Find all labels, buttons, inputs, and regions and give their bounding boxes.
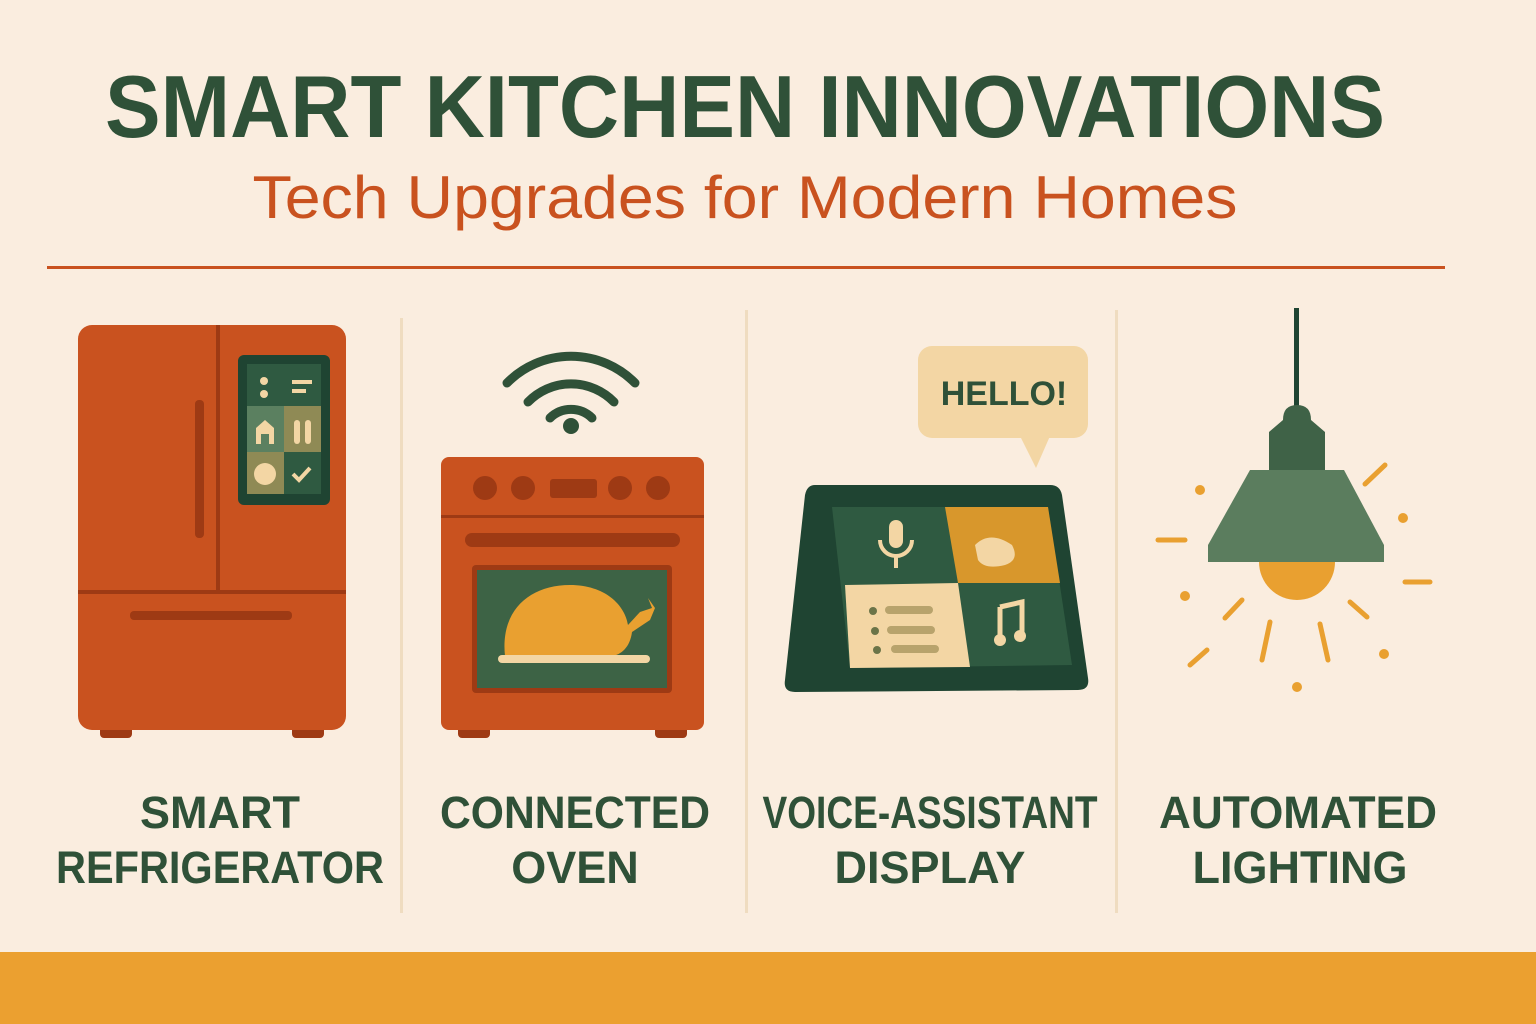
icon: automated lighting [1158, 308, 1430, 692]
subtitle: Tech Upgrades for Modern Homes [252, 164, 1238, 231]
label: connected oven: CONNECTED [440, 787, 710, 838]
label: smart refrigerator: REFRIGERATOR [56, 842, 384, 893]
label: smart refrigerator: SMART [140, 787, 300, 838]
callout: hello bubble [918, 346, 1088, 468]
label: automated lighting: AUTOMATED [1159, 787, 1437, 838]
callout: hello bubble: HELLO! [941, 375, 1067, 413]
icon: smart refrigerator [78, 325, 346, 738]
footer band [0, 952, 1536, 1024]
label: connected oven: OVEN [511, 842, 639, 893]
icon: voice-assistant display [785, 346, 1088, 692]
title: SMART KITCHEN INNOVATIONS [105, 57, 1385, 156]
label: voice-assistant display: VOICE-ASSISTANT [762, 787, 1098, 838]
icon: connected oven [441, 356, 704, 738]
label: automated lighting: LIGHTING [1193, 842, 1407, 893]
label: voice-assistant display: DISPLAY [835, 842, 1025, 893]
